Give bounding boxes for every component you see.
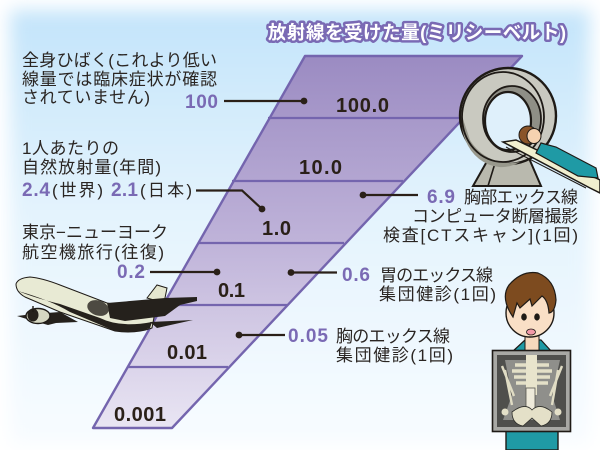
text block: natural radiation: 自然放射量(年間)	[22, 158, 161, 177]
scale value: 100.0: 100.0	[336, 95, 389, 117]
value: 100 with leader	[185, 92, 307, 113]
scale value: 0.001: 0.001	[114, 404, 166, 426]
chart: dose scale parallelogram	[93, 56, 522, 428]
value: 100 with leader: 100	[185, 92, 218, 113]
callout: chest X-ray 0.05	[236, 326, 453, 365]
icon: airplane	[16, 277, 197, 332]
text block: Tokyo-New York flight: 航空機旅行(往復)	[22, 243, 164, 262]
scale value: 0.01: 0.01	[167, 342, 207, 364]
callout: CT scan 6.9: コンピュータ断層撮影	[412, 207, 578, 226]
icon: CT scanner with patient	[460, 68, 600, 193]
callout: chest X-ray 0.05: 胸のエックス線	[336, 327, 450, 346]
callout: stomach X-ray 0.6	[288, 265, 496, 304]
callout: stomach X-ray 0.6: 集団健診(1回)	[379, 285, 496, 304]
value: 2.4 world and 2.1 Japan with leader	[22, 180, 265, 212]
text block: natural radiation: 1人あたりの	[22, 139, 119, 158]
callout: chest X-ray 0.05: 集団健診(1回)	[336, 346, 453, 365]
callout: stomach X-ray 0.6: 0.6	[342, 265, 370, 286]
value: 2.4 world and 2.1 Japan with leader: 2.4	[22, 180, 50, 201]
value: 2.4 world and 2.1 Japan with leader: (日本)	[140, 181, 192, 200]
text block: Tokyo-New York flight: 東京−ニューヨーク	[22, 223, 168, 242]
text block: whole-body exposure: 線量では臨床症状が確認	[22, 70, 217, 89]
callout: stomach X-ray 0.6: 胃のエックス線	[380, 266, 493, 285]
value: 0.2 with leader: 0.2	[117, 262, 145, 283]
callout: CT scan 6.9	[360, 187, 578, 245]
scale value: 10.0: 10.0	[299, 157, 342, 179]
title: 放射線を受けた量(ミリシーベルト)	[268, 22, 566, 43]
scale value: 0.1: 0.1	[218, 280, 245, 302]
text block: whole-body exposure: 全身ひばく(これより低い	[22, 51, 217, 70]
text block: natural radiation	[22, 139, 161, 177]
text block: whole-body exposure: されていません)	[22, 88, 150, 107]
callout: CT scan 6.9: 検査[CTスキャン](1回)	[383, 226, 578, 245]
value: 2.4 world and 2.1 Japan with leader: (世界)	[52, 181, 103, 200]
icon: person holding chest X-ray	[492, 272, 570, 450]
callout: CT scan 6.9: 6.9	[427, 187, 455, 208]
text block: Tokyo-New York flight	[22, 223, 168, 262]
callout: CT scan 6.9: 胸部エックス線	[464, 188, 578, 207]
value: 0.2 with leader	[117, 262, 220, 283]
callout: chest X-ray 0.05: 0.05	[288, 326, 328, 347]
text block: whole-body exposure	[22, 51, 217, 107]
value: 2.4 world and 2.1 Japan with leader: 2.1	[111, 180, 138, 201]
scale value: 1.0: 1.0	[262, 218, 291, 240]
